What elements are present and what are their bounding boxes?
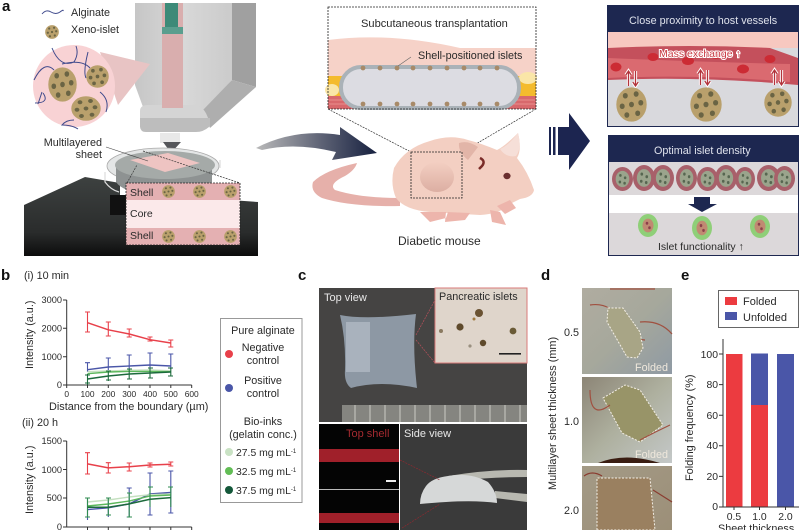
bars (726, 354, 794, 507)
chart: 10 min: 500 (164, 389, 178, 399)
photo 1.0 folded: 1.0 (564, 416, 579, 428)
photo: top shell fluorescence: Top shell (346, 428, 389, 440)
chart: 10 min: (i) 10 min (24, 270, 69, 282)
legend: Bio-inks (244, 416, 283, 428)
photo 2.0 (564, 466, 672, 530)
printing stage (24, 148, 258, 256)
photo: pancreatic islets: Pancreatic islets (439, 291, 518, 303)
panel: subcutaneous transplantation inset (325, 7, 537, 109)
photo 0.5 folded: 0.5 (564, 327, 579, 339)
legend: Unfolded (743, 312, 787, 324)
panel e: folding frequency chart: 60 (706, 411, 718, 422)
chart: 20 h: 500 (47, 493, 62, 503)
legend: Negative (242, 342, 284, 354)
legend: (gelatin conc.) (229, 429, 297, 441)
chart: 20 h: Intensity (a.u.) (24, 446, 36, 514)
diabetic mouse (312, 109, 536, 248)
legend: -1 (291, 468, 297, 474)
chart: 20 h: 1000 (42, 465, 62, 475)
panel: optimal islet density: Islet functionality ↑ (658, 241, 744, 253)
panel: subcutaneous transplantation inset: Shell-positioned islets (418, 50, 523, 62)
printer head (135, 3, 256, 153)
panel: optimal islet density (608, 135, 799, 256)
legend: 32.5 mg mL (236, 467, 291, 478)
panel: close proximity to host vessels (607, 5, 799, 127)
islets in vessel panel (616, 87, 647, 122)
chart: 10 min: Intensity (a.u.) (24, 301, 36, 369)
chart: 10 min: 1000 (42, 352, 62, 362)
legend: -1 (291, 487, 297, 493)
panel e: folding frequency chart: 0.5 (727, 512, 741, 523)
chart: 10 min (24, 270, 208, 413)
legend: control (247, 388, 279, 400)
photo: side view: Side view (404, 428, 451, 440)
chart: 10 min: 3000 (42, 295, 62, 305)
legend (718, 290, 798, 328)
down arrow (688, 197, 717, 212)
mass exchange label: Mass exchange ↑ (659, 48, 741, 60)
legend: -1 (291, 449, 297, 455)
panel e: folding frequency chart: 100 (701, 350, 718, 361)
legend: alginate: Alginate (71, 7, 110, 19)
photo 1.0 folded: Folded (635, 449, 668, 461)
axis label: Multilayer sheet thickness (mm) (547, 337, 559, 490)
photo: top view: Top view (324, 292, 367, 304)
photo 0.5 folded (564, 288, 672, 374)
diabetic mouse: Diabetic mouse (398, 234, 481, 248)
legend: alginate (42, 7, 110, 19)
panel e: folding frequency chart: 1.0 (752, 512, 767, 523)
label: multilayered sheet (44, 137, 148, 161)
panel a: 3D bioprinting (2, 0, 258, 256)
legend: 27.5 mg mL (236, 448, 291, 459)
photo 0.5 folded: Folded (635, 362, 668, 374)
legend: xeno-islet (45, 24, 119, 39)
arrow: printing to mouse (256, 127, 377, 160)
legend: control (247, 355, 279, 367)
panel: close proximity to host vessels: Close proximity to host vessels (629, 15, 778, 27)
chart: 10 min: 600 (185, 389, 199, 399)
panel e: folding frequency chart: 0 (712, 502, 718, 513)
arrow: mouse to outcomes (549, 113, 590, 170)
label c: c (298, 267, 306, 284)
header (607, 5, 799, 32)
legend: xeno-islet: Xeno-islet (71, 24, 119, 36)
panel d: implanted sheets (541, 267, 672, 530)
red blood cells (610, 53, 776, 74)
sparse functional islets (638, 214, 770, 240)
axes (719, 339, 799, 510)
chart: 10 min: 300 (122, 389, 137, 399)
photo: top shell fluorescence (319, 424, 399, 530)
legend: Pure alginate (231, 325, 295, 337)
legend: Folded (743, 296, 777, 308)
panel e: folding frequency chart: 20 (706, 472, 718, 483)
label b: b (1, 267, 10, 284)
cross-section inset: Shell (130, 187, 153, 199)
panel: subcutaneous transplantation inset: Subcutaneous transplantation (361, 18, 508, 30)
chart: 10 min: 100 (81, 389, 95, 399)
panel: optimal islet density: Optimal islet density (654, 145, 751, 157)
photo 2.0: 2.0 (564, 505, 579, 517)
chart: 10 min: 0 (57, 380, 62, 390)
chart: 10 min: 400 (143, 389, 157, 399)
label d: d (541, 267, 550, 284)
panel b: intensity charts (1, 267, 302, 530)
photo 1.0 folded (564, 377, 672, 463)
panel e: folding frequency chart: 40 (706, 441, 718, 452)
photo: side view (400, 424, 527, 530)
magnified islets in alginate (33, 45, 150, 129)
chart: 20 h: (ii) 20 h (22, 417, 58, 429)
panel e: folding frequency chart: 2.0 (778, 512, 793, 523)
legend (220, 318, 302, 502)
chart: 10 min: Distance from the boundary (µm) (49, 401, 208, 413)
panel e: folding frequency chart: 80 (706, 380, 718, 391)
cross-section inset: Core (130, 208, 153, 220)
panel c: photographs (298, 267, 527, 530)
chart: 10 min: 200 (101, 389, 116, 399)
chart: 20 h: 1500 (42, 436, 62, 446)
label e: e (681, 267, 689, 284)
header (608, 135, 799, 162)
chart: 10 min: 0 (64, 389, 69, 399)
dense islets row (612, 165, 795, 191)
panel e: folding frequency chart: Folding frequency (%) (684, 374, 696, 481)
legend: 37.5 mg mL (236, 486, 291, 497)
legend: Positive (244, 375, 282, 387)
photo: top view (319, 288, 527, 422)
exchange arrows (626, 70, 784, 86)
chart: 10 min: 2000 (42, 324, 62, 334)
label: multilayered sheet: Multilayered (44, 137, 102, 149)
panel e: folding frequency chart (681, 267, 799, 530)
cross-section inset (126, 151, 240, 245)
cross-section inset: Shell (130, 230, 153, 242)
photo: pancreatic islets (416, 288, 527, 363)
islets along the shell (361, 66, 499, 106)
chart: 20 h (22, 417, 192, 530)
label: multilayered sheet: sheet (76, 149, 102, 161)
